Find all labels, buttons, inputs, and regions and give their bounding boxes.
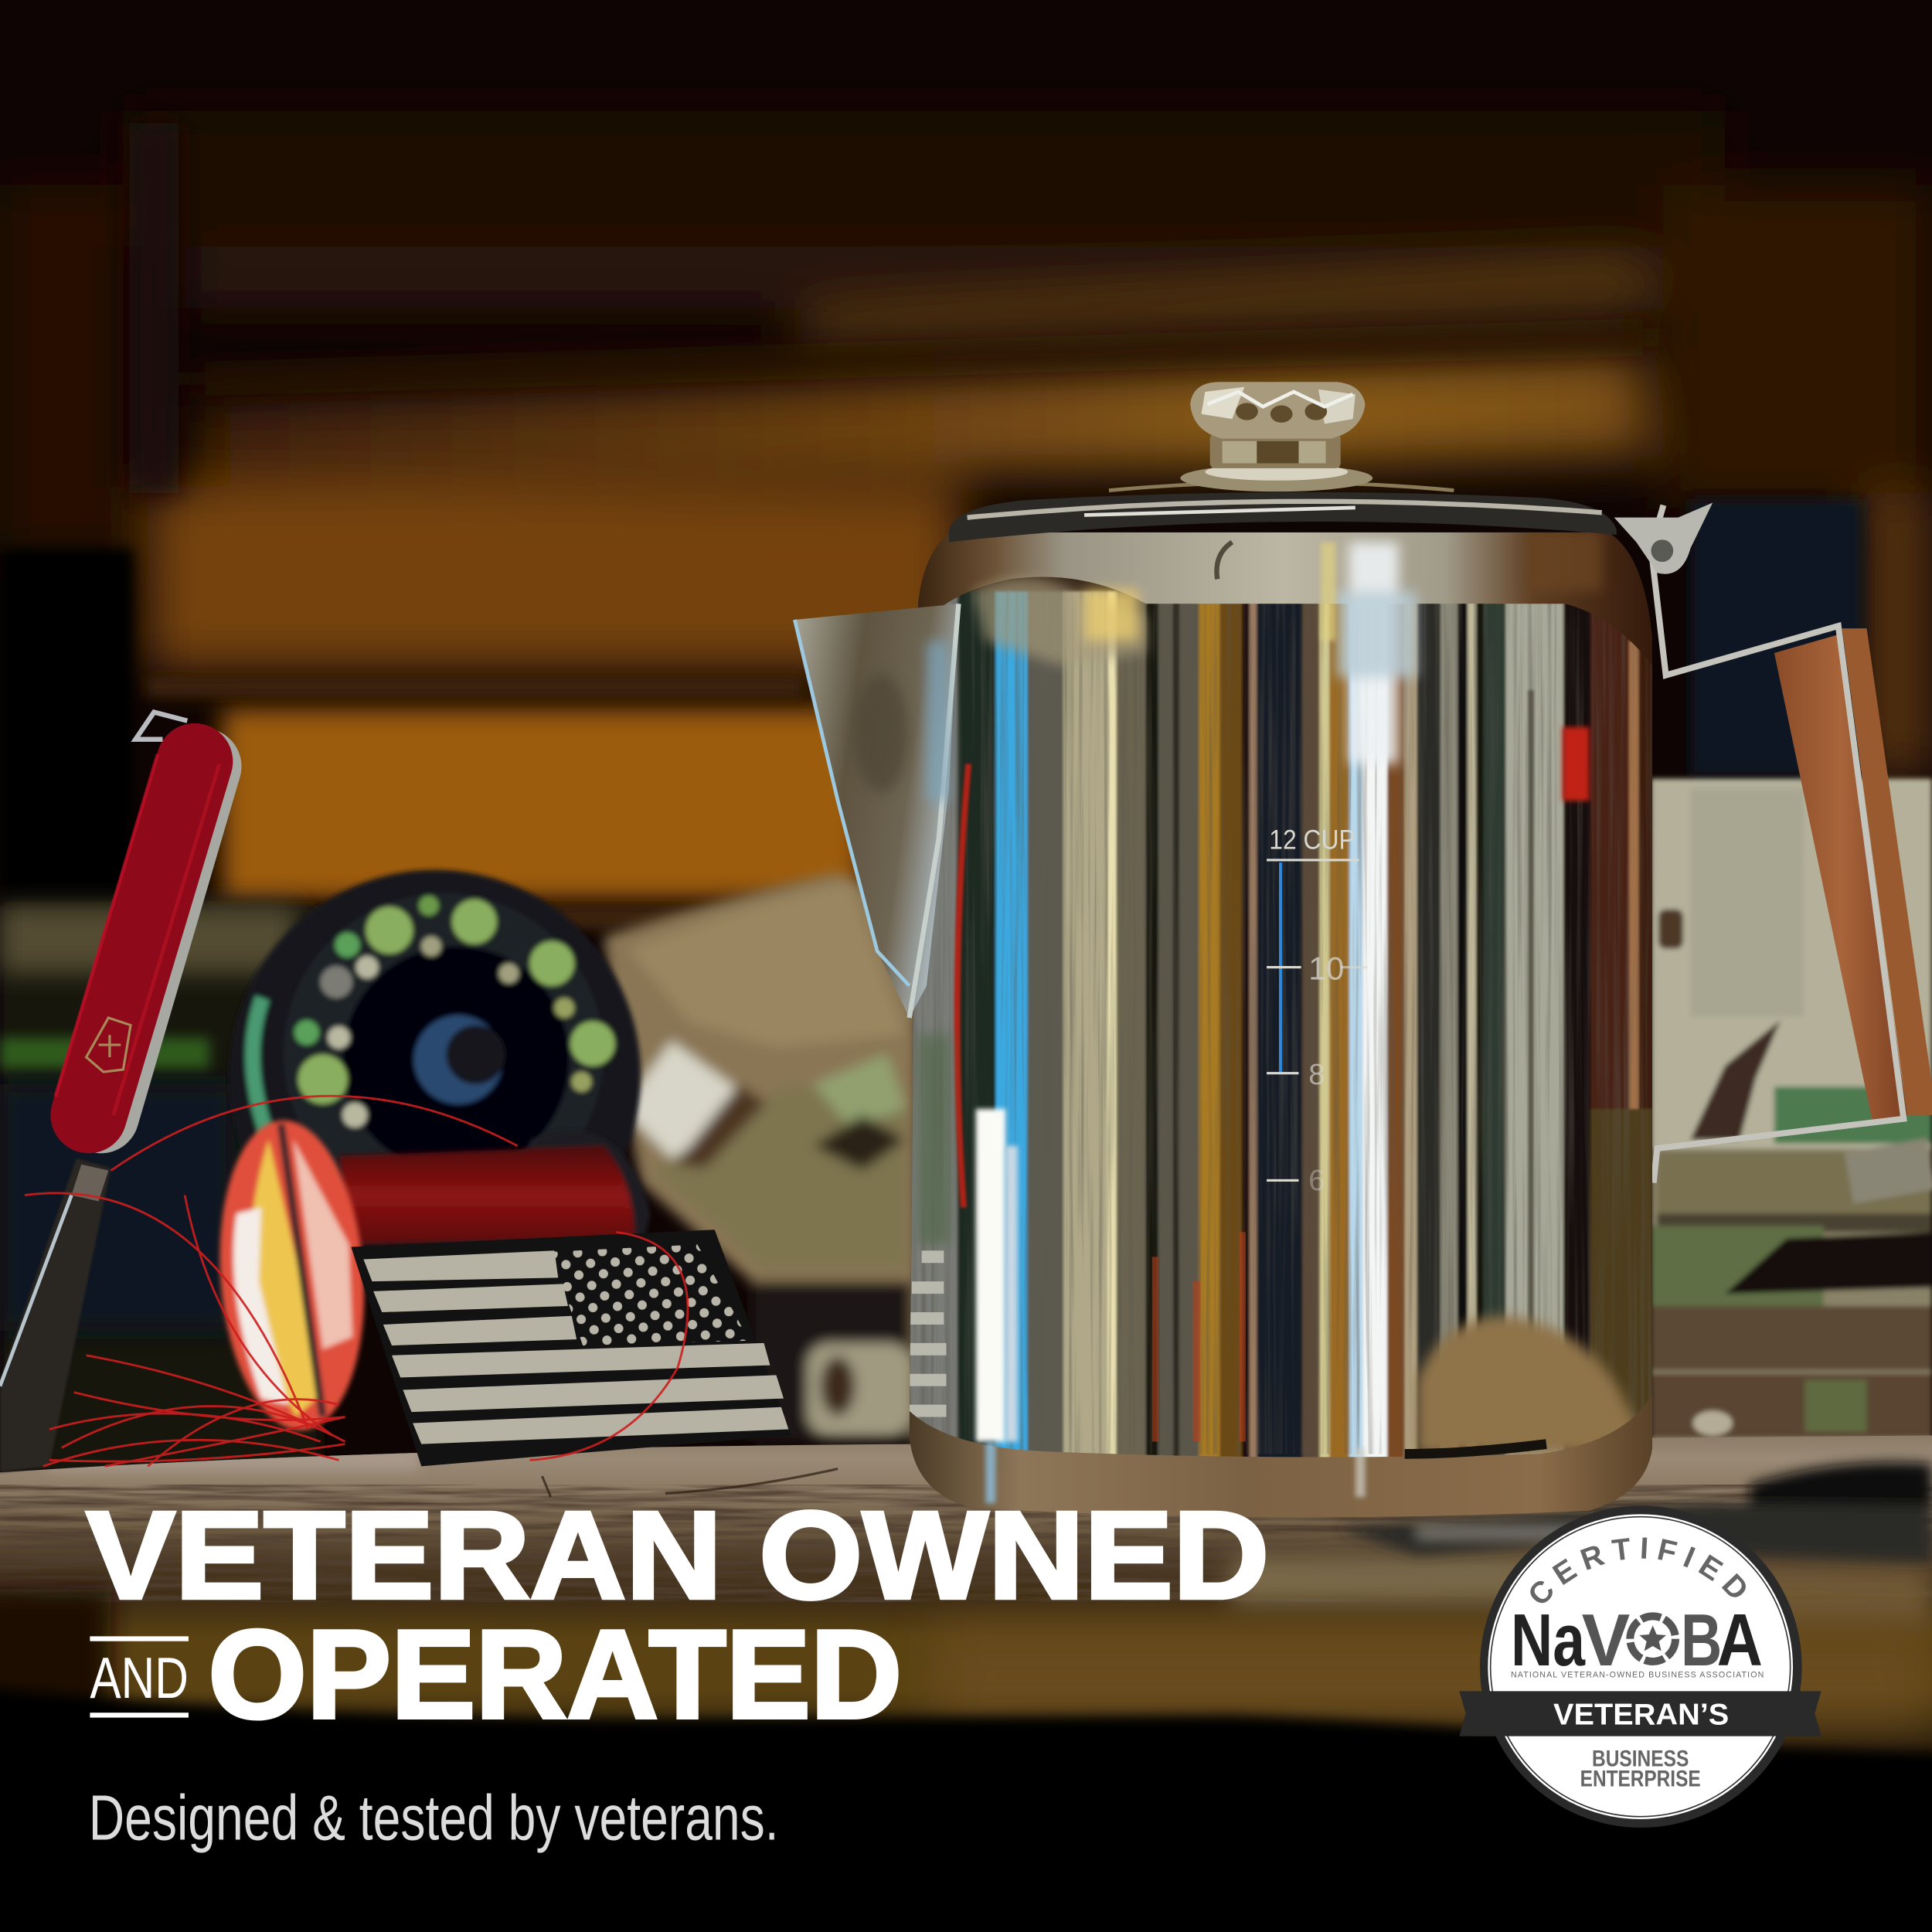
highlight streaks — [976, 1109, 1005, 1441]
badge: NaVOBA wordmark: Na — [1511, 1599, 1585, 1682]
cup markings: 6 — [1308, 1164, 1325, 1197]
fishing line spool — [210, 1115, 651, 1435]
Swiss army knife — [0, 713, 219, 1472]
badge: NaVOBA wordmark: B — [1681, 1599, 1722, 1682]
badge: BUSINESS: BUSINESS — [1592, 1747, 1689, 1772]
cup markings — [1267, 825, 1368, 1197]
headline: VETERAN OWNED AND OPERATED — [87, 1486, 1269, 1745]
shoulder reflection — [918, 532, 1652, 665]
spool face with label — [210, 1115, 374, 1435]
orange lower reflections — [1152, 1232, 1246, 1441]
wooden table — [0, 1399, 1932, 1932]
badge: ribbon — [1459, 1691, 1821, 1736]
reflected tabletop glare — [1417, 1316, 1651, 1454]
camouflage fabric, left of pot — [604, 872, 918, 1441]
badge: NaVOBA wordmark: V — [1582, 1599, 1630, 1682]
camouflage fabric, right of pot — [1651, 779, 1932, 1444]
pot handle — [1651, 505, 1932, 1183]
cup markings: 10 — [1308, 951, 1344, 987]
lid rim — [949, 482, 1617, 543]
badge: CERTIFIED: CERTIFIED — [1530, 1538, 1746, 1603]
dark clutter behind table, left — [0, 906, 321, 1472]
American flag patch — [351, 1230, 791, 1466]
percolator coffee pot — [794, 382, 1932, 1522]
AND ruled label — [90, 1636, 189, 1718]
spout — [794, 604, 958, 1018]
badge: association name: NATIONAL VETERAN-OWNED BUSINESS ASSOCIATION — [1511, 1670, 1764, 1679]
badge: NaVOBA wordmark — [1511, 1599, 1763, 1682]
dark foreground shadow under table — [0, 1682, 1932, 1932]
badge: VETERAN'S: VETERAN’S — [1553, 1699, 1729, 1732]
pliers on table, out of focus — [1337, 1462, 1932, 1563]
red handle — [56, 713, 219, 1115]
cup markings: 12 CUP — [1269, 825, 1355, 855]
cup markings: 8 — [1308, 1058, 1325, 1091]
base reflection — [910, 1393, 1654, 1522]
lid hinge — [1614, 503, 1713, 574]
headline line two: OPERATED — [208, 1605, 902, 1745]
reflected flag — [910, 1250, 946, 1417]
glass knob — [1180, 382, 1372, 492]
subheading: Designed & tested by veterans. — [89, 1781, 779, 1853]
knife blade — [0, 1158, 111, 1472]
AND ruled label: AND — [90, 1645, 189, 1710]
headline line one: VETERAN OWNED — [87, 1486, 1269, 1625]
pot body — [910, 524, 1654, 1522]
loose red thread — [25, 1096, 688, 1466]
NaVOBA certification badge — [1459, 1505, 1821, 1828]
badge: ENTERPRISE: ENTERPRISE — [1580, 1767, 1701, 1792]
red thread on spool — [338, 1131, 651, 1244]
badge: NaVOBA wordmark: A — [1717, 1599, 1763, 1682]
fly-fishing reel — [230, 870, 641, 1281]
vertical reflection stripes — [910, 591, 1652, 1478]
